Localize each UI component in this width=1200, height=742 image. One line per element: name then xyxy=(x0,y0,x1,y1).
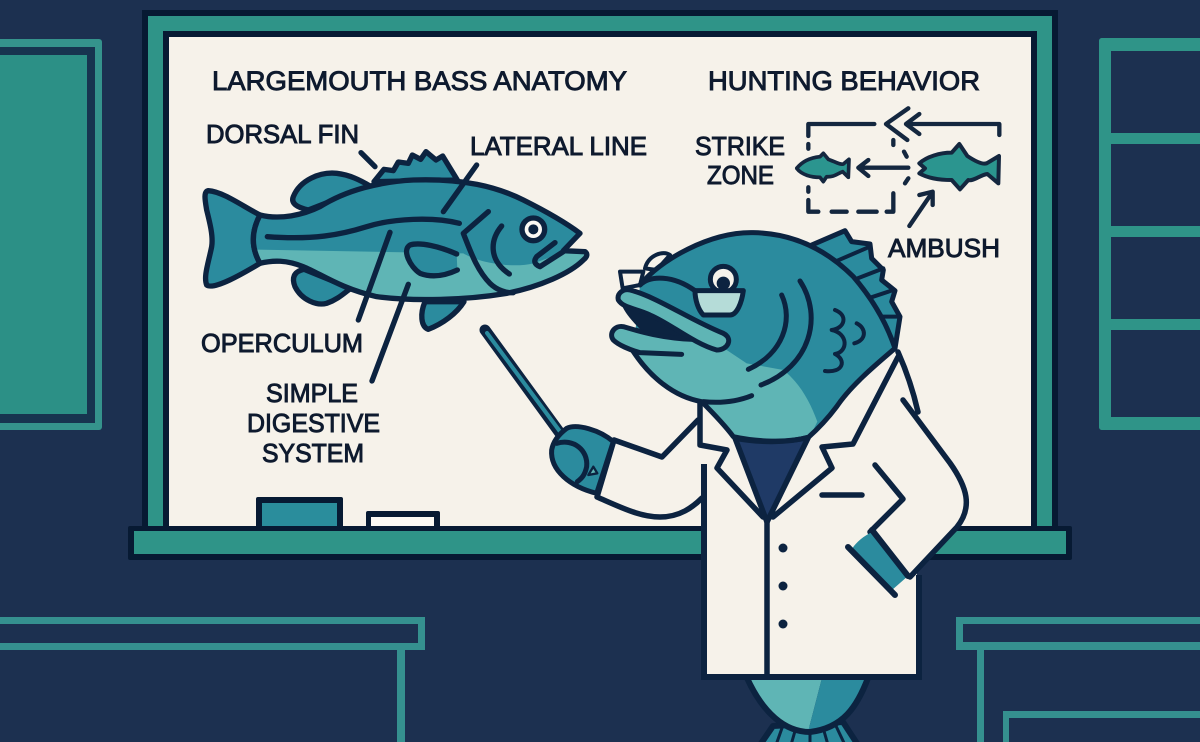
spiny dorsal fin xyxy=(374,152,457,182)
ambush arrow xyxy=(909,192,933,226)
gill cover xyxy=(463,212,513,293)
eye xyxy=(710,266,736,292)
center placket xyxy=(764,520,770,675)
label: strike zone: STRIKE xyxy=(695,131,785,161)
eraser xyxy=(256,497,343,529)
right desk xyxy=(956,617,1200,742)
label: strike zone xyxy=(695,131,785,190)
label: ambush: AMBUSH xyxy=(888,233,1000,263)
buttons xyxy=(778,544,788,628)
pectoral fin xyxy=(407,244,457,276)
eye xyxy=(522,218,545,241)
pelvic fin xyxy=(422,302,464,329)
near glasses lens xyxy=(695,291,743,315)
rear dorsal fin xyxy=(293,173,370,210)
far glasses lens xyxy=(645,253,670,270)
glasses arm xyxy=(620,272,643,288)
chevrons xyxy=(886,108,999,140)
upper lip xyxy=(618,290,729,350)
brow line xyxy=(640,278,695,291)
predator fish xyxy=(919,144,999,189)
leader: operculum xyxy=(358,232,390,320)
heading: hunting behavior: HUNTING BEHAVIOR xyxy=(708,66,980,96)
tail xyxy=(205,191,260,286)
body xyxy=(253,180,587,300)
label: simple digestive system: SIMPLE xyxy=(266,378,358,408)
dashed strike box xyxy=(808,124,908,212)
leader: dorsal fin xyxy=(361,153,375,167)
whiteboard xyxy=(142,10,1058,531)
sleeve right xyxy=(870,352,966,577)
back fin xyxy=(812,231,900,348)
sleeve left xyxy=(597,420,702,517)
inner gill xyxy=(493,226,509,274)
coat lines xyxy=(597,352,966,677)
lateral line xyxy=(267,219,459,238)
label: operculum: OPERCULUM xyxy=(201,328,363,358)
head shape xyxy=(633,233,895,441)
lab coat xyxy=(597,352,966,676)
mouth xyxy=(535,243,563,267)
right window xyxy=(1099,38,1200,430)
label: dorsal fin: DORSAL FIN xyxy=(206,119,359,149)
pocket xyxy=(822,492,862,498)
lower tail xyxy=(747,678,868,742)
leader: digestive system xyxy=(372,284,408,381)
chalk xyxy=(366,511,440,529)
leader: lateral line xyxy=(443,165,477,212)
chin line xyxy=(703,396,752,402)
lapels xyxy=(700,357,898,522)
label: simple digestive system: DIGESTIVE xyxy=(247,408,380,438)
arrow to prey xyxy=(858,160,908,176)
scales xyxy=(825,310,864,371)
head outline xyxy=(633,233,895,441)
left desk xyxy=(0,617,425,742)
lower lip xyxy=(611,327,702,353)
body outline xyxy=(253,180,587,300)
shirt xyxy=(735,438,808,520)
pectoral fin outline xyxy=(407,244,457,276)
board ledge xyxy=(128,526,1072,560)
gill lines xyxy=(748,281,811,385)
left wall panel xyxy=(0,39,102,430)
cuff xyxy=(848,530,908,595)
coat outline xyxy=(704,467,919,677)
pointer xyxy=(485,330,567,441)
prey fish xyxy=(797,153,849,182)
lower lip line xyxy=(612,326,693,354)
hand xyxy=(552,427,613,493)
label: lateral line: LATERAL LINE xyxy=(470,131,647,161)
strike zone diagram xyxy=(797,108,999,226)
anatomy bass diagram xyxy=(205,152,587,381)
light belly xyxy=(633,340,817,441)
fish professor xyxy=(485,231,966,742)
label: strike zone: ZONE xyxy=(707,160,774,190)
anal fin xyxy=(293,269,351,304)
belly xyxy=(256,250,587,300)
collar line xyxy=(735,437,808,442)
heading: anatomy: LARGEMOUTH BASS ANATOMY xyxy=(212,66,627,96)
label: simple digestive system: SYSTEM xyxy=(262,438,364,468)
label: simple digestive system xyxy=(247,378,380,468)
mouth interior xyxy=(622,304,697,341)
head xyxy=(611,231,900,442)
